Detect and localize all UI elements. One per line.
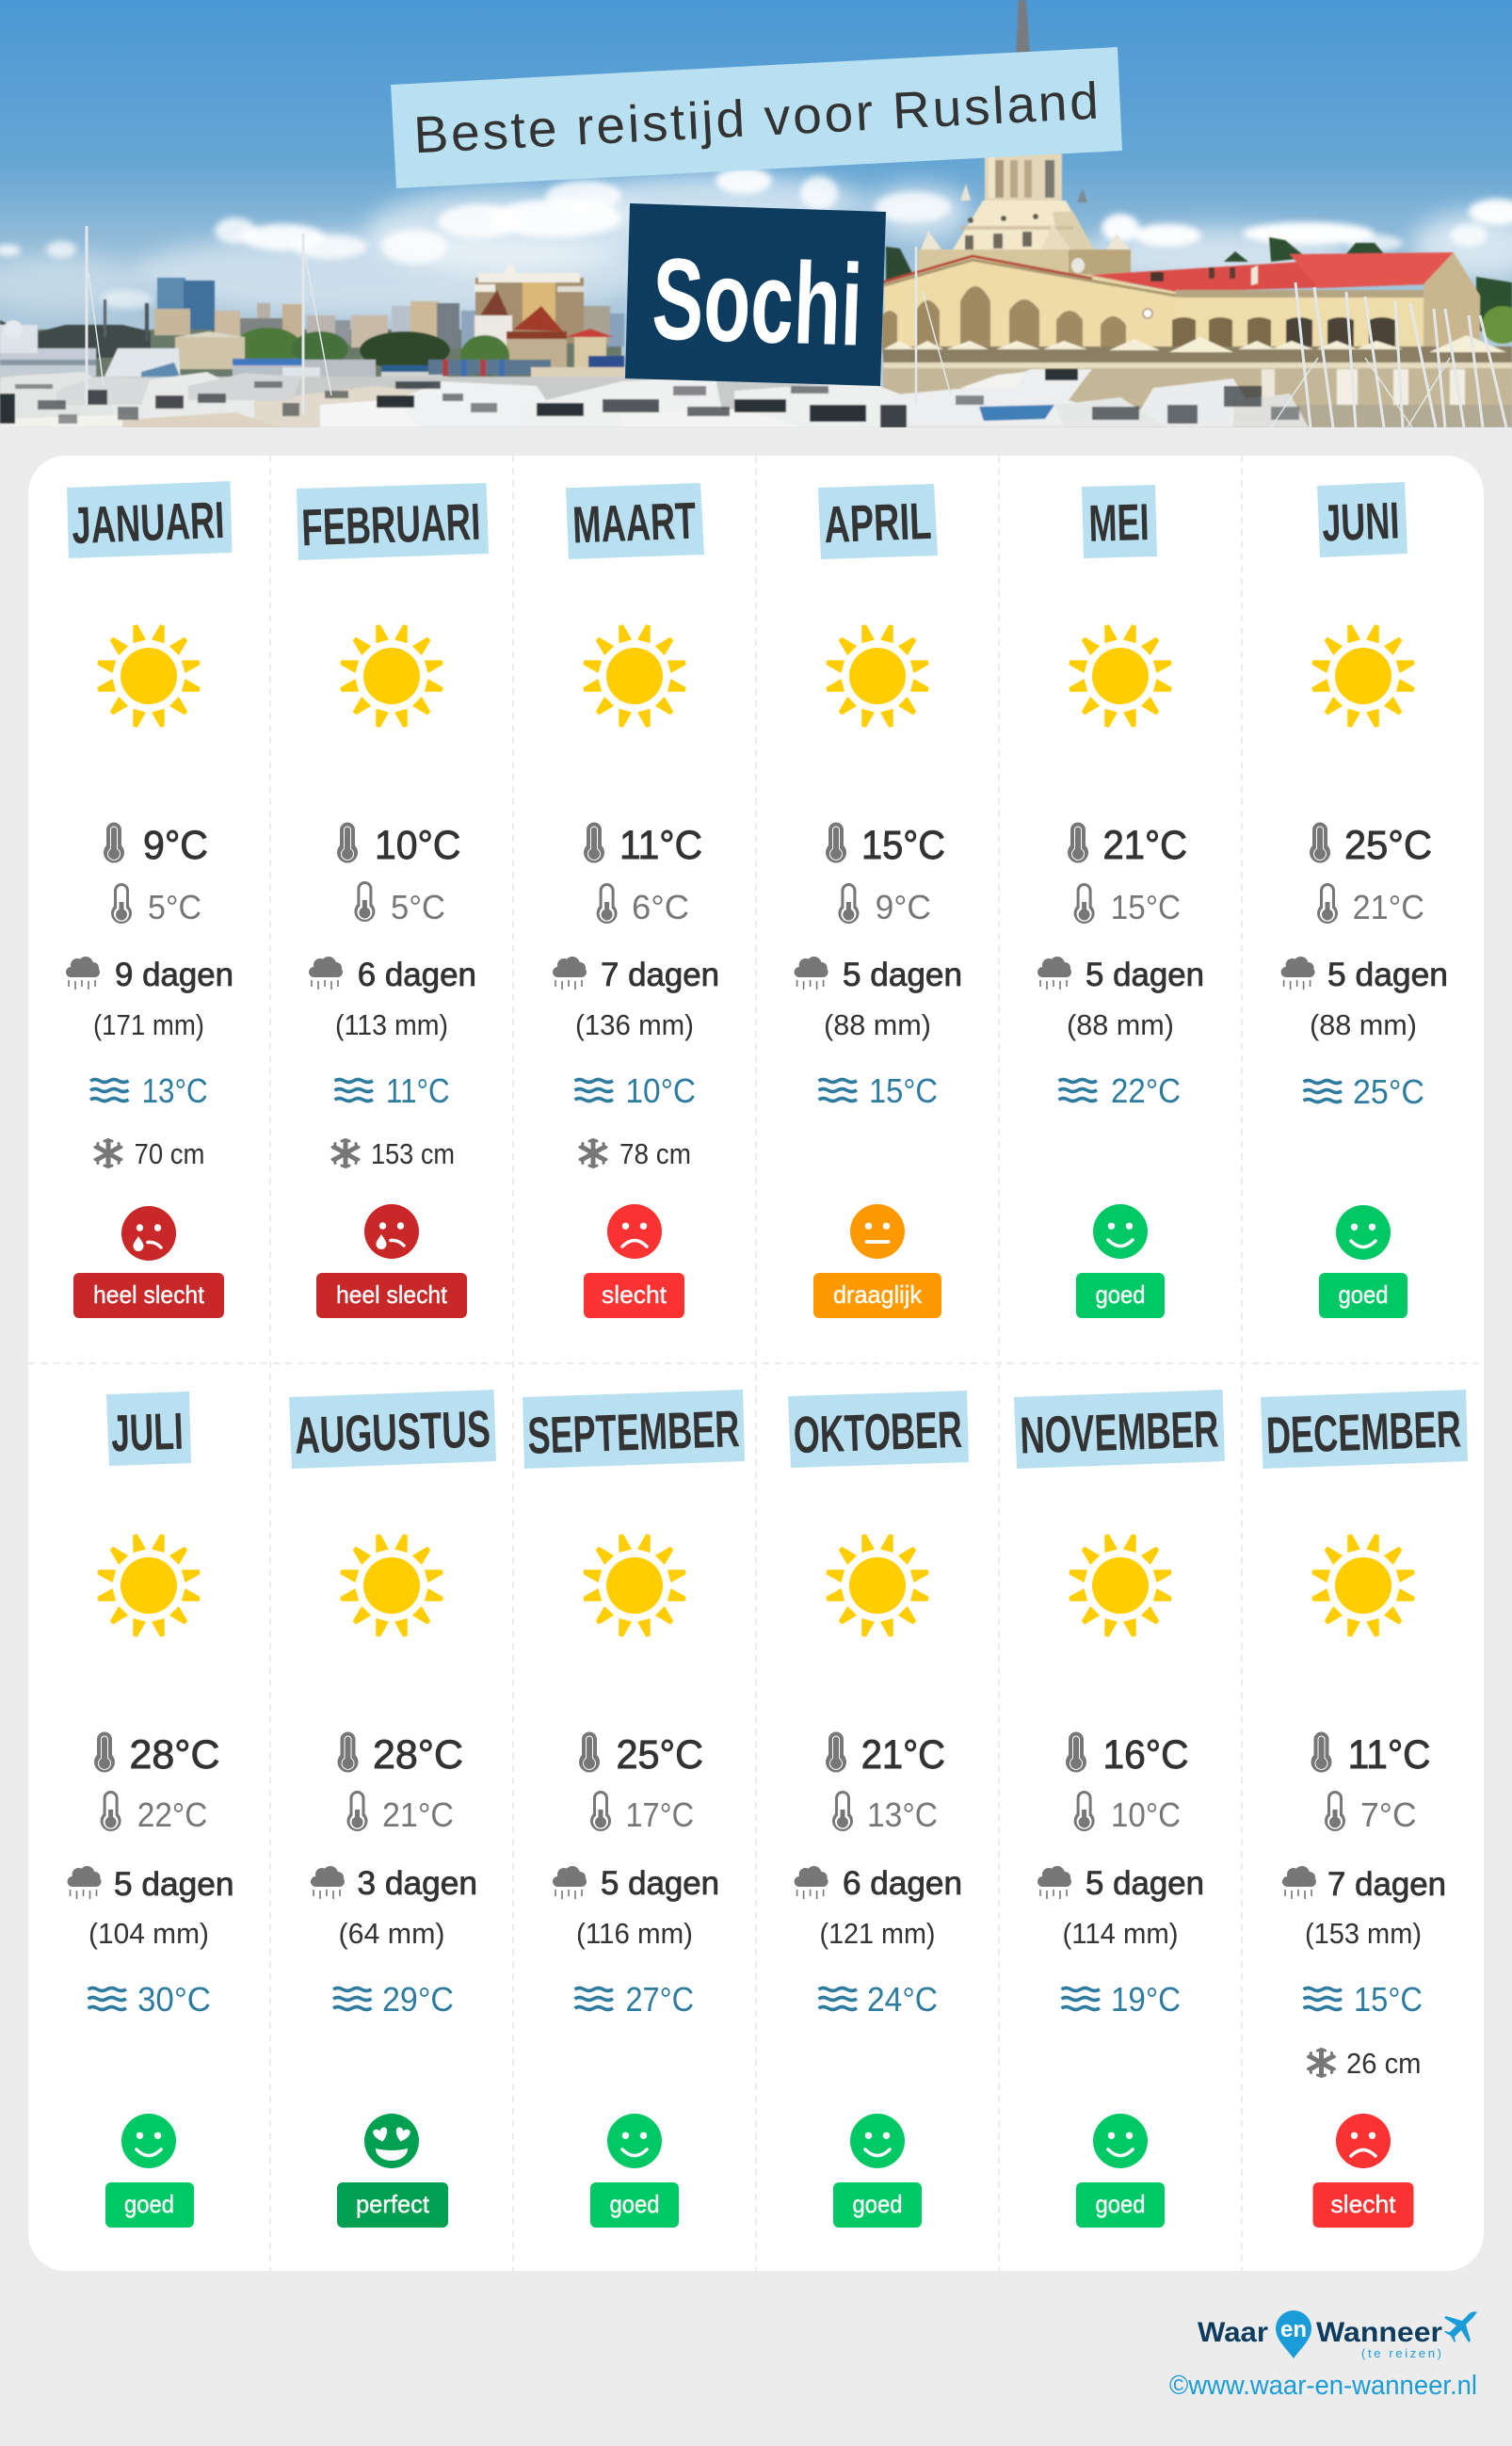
icon: sun bbox=[97, 624, 201, 728]
large yachts left bbox=[0, 348, 96, 377]
rating badge: slecht bbox=[1331, 2190, 1396, 2218]
rain days: 9 dagen bbox=[115, 957, 233, 993]
icon: thermometer low bbox=[1317, 883, 1338, 924]
sea temperature: 19°C bbox=[1111, 1980, 1181, 2019]
rainfall: (113 mm) bbox=[335, 1008, 448, 1041]
min temperature: 13°C bbox=[867, 1795, 938, 1834]
column: februari bbox=[297, 483, 489, 1318]
rainfall: (88 mm) bbox=[1310, 1008, 1417, 1041]
rain days: 7 dagen bbox=[1327, 1866, 1446, 1903]
icon: sun bbox=[1311, 1534, 1415, 1637]
rating face bbox=[121, 2114, 176, 2168]
column: maart bbox=[553, 483, 719, 1318]
icon: sun bbox=[1069, 1534, 1172, 1637]
logo: Waar en Wanneer bbox=[1198, 2310, 1477, 2360]
icon: sun bbox=[97, 1534, 201, 1637]
rainfall: (171 mm) bbox=[93, 1008, 204, 1041]
station building bbox=[882, 0, 1512, 427]
rain days: 5 dagen bbox=[1086, 1865, 1204, 1902]
month heading bbox=[788, 1391, 969, 1468]
sea temperature: 29°C bbox=[382, 1980, 454, 2019]
rating face bbox=[607, 2114, 662, 2168]
month heading: APRIL bbox=[823, 491, 932, 554]
tall apartment building bbox=[475, 278, 584, 344]
icon: waves bbox=[574, 1079, 613, 1102]
icon: thermometer high bbox=[1066, 1732, 1086, 1773]
icon: sun bbox=[583, 1534, 686, 1637]
rain days: 7 dagen bbox=[601, 957, 719, 993]
hero photo of Sochi harbour bbox=[0, 0, 1512, 427]
icon: waves bbox=[1303, 1081, 1342, 1102]
month heading bbox=[289, 1390, 496, 1469]
max temperature: 11°C bbox=[619, 823, 702, 868]
rain days: 5 dagen bbox=[1327, 957, 1448, 993]
icon: sun bbox=[1069, 624, 1172, 728]
icon: rain cloud bbox=[553, 1866, 587, 1899]
icon: thermometer low bbox=[1074, 883, 1095, 924]
icon: waves bbox=[1303, 1988, 1342, 2009]
rating badge: slecht bbox=[602, 1280, 668, 1309]
month heading bbox=[566, 483, 704, 559]
icon: rain cloud bbox=[309, 957, 343, 990]
icon: sun bbox=[1311, 624, 1415, 728]
icon: sun bbox=[340, 624, 443, 728]
rain days: 6 dagen bbox=[843, 1865, 962, 1902]
rating face bbox=[1336, 2114, 1391, 2168]
icon: rain cloud bbox=[795, 957, 828, 990]
column: april bbox=[795, 484, 962, 1318]
column: september bbox=[523, 1390, 745, 2228]
logo: Waar en Wanneer: en bbox=[1280, 2317, 1307, 2342]
sea temperature: 15°C bbox=[1354, 1980, 1423, 2019]
icon: waves bbox=[333, 1988, 371, 2009]
icon: airplane bbox=[1444, 2311, 1477, 2342]
icon: thermometer high bbox=[826, 823, 846, 863]
min temperature: 6°C bbox=[632, 888, 689, 926]
month heading bbox=[818, 484, 938, 559]
icon: sun bbox=[583, 624, 686, 728]
icon: thermometer high bbox=[337, 823, 358, 863]
month heading bbox=[1014, 1390, 1225, 1469]
column: juni bbox=[1281, 482, 1448, 1318]
max temperature: 28°C bbox=[373, 1732, 463, 1778]
sea temperature: 22°C bbox=[1111, 1071, 1181, 1110]
month heading: JANUARI bbox=[71, 491, 225, 555]
icon: rain cloud bbox=[1282, 1866, 1316, 1899]
icon: waves bbox=[88, 1988, 126, 2009]
icon: thermometer low bbox=[832, 1791, 853, 1831]
rating badge bbox=[337, 2182, 448, 2228]
masts bbox=[87, 226, 1506, 427]
icon: thermometer high bbox=[1310, 823, 1330, 863]
sea temperature: 25°C bbox=[1353, 1072, 1424, 1111]
rain days: 5 dagen bbox=[114, 1866, 233, 1903]
icon: rain cloud bbox=[553, 957, 587, 990]
rating face bbox=[1093, 1204, 1148, 1259]
column: december bbox=[1261, 1390, 1468, 2228]
min temperature: 10°C bbox=[1111, 1795, 1181, 1834]
rainfall: (121 mm) bbox=[819, 1917, 936, 1950]
rating face bbox=[850, 1204, 905, 1259]
rating badge bbox=[1076, 1273, 1165, 1318]
rating badge: goed bbox=[1339, 1280, 1388, 1309]
month heading: NOVEMBER bbox=[1019, 1399, 1219, 1465]
sea temperature: 24°C bbox=[867, 1980, 938, 2019]
panel: monthly calendar card bbox=[28, 456, 1484, 2271]
rating badge bbox=[1076, 2182, 1165, 2228]
column: augustus bbox=[289, 1390, 496, 2228]
icon: thermometer high bbox=[1311, 1732, 1331, 1773]
sea temperature: 30°C bbox=[137, 1980, 211, 2019]
min temperature: 5°C bbox=[391, 888, 445, 926]
month heading bbox=[67, 481, 232, 558]
icon: snowflake bbox=[95, 1139, 121, 1167]
rating badge: goed bbox=[853, 2190, 902, 2218]
title banner: Beste reistijd voor Rusland bbox=[412, 72, 1100, 164]
rating badge: goed bbox=[610, 2190, 659, 2218]
icon: sun bbox=[826, 1534, 929, 1637]
rain days: 6 dagen bbox=[358, 957, 476, 993]
max temperature: 25°C bbox=[1344, 823, 1432, 868]
max temperature: 28°C bbox=[130, 1732, 220, 1778]
icon: rain cloud bbox=[1037, 1866, 1071, 1899]
website credit: ©www.waar-en-wanneer.nl bbox=[1169, 2371, 1477, 2401]
icon: thermometer low bbox=[590, 1791, 611, 1831]
month heading: AUGUSTUS bbox=[294, 1399, 491, 1465]
rating face bbox=[364, 1204, 419, 1259]
column: oktober bbox=[788, 1391, 969, 2228]
rating badge bbox=[1319, 1273, 1407, 1318]
rating badge bbox=[73, 1273, 224, 1318]
rating face bbox=[607, 1204, 662, 1259]
max temperature: 25°C bbox=[616, 1732, 703, 1778]
icon: waves bbox=[335, 1079, 373, 1102]
rating badge bbox=[584, 1273, 684, 1318]
rating face bbox=[121, 1206, 176, 1261]
max temperature: 15°C bbox=[861, 823, 945, 868]
min temperature: 9°C bbox=[876, 888, 931, 926]
rain days: 5 dagen bbox=[1086, 957, 1204, 993]
icon: snowflake bbox=[580, 1139, 606, 1167]
rainfall: (104 mm) bbox=[88, 1917, 209, 1950]
month heading: JUNI bbox=[1321, 491, 1400, 553]
month heading: JULI bbox=[110, 1402, 185, 1462]
sea temperature: 10°C bbox=[625, 1071, 696, 1110]
rainfall: (136 mm) bbox=[575, 1008, 694, 1041]
sea temperature: 27°C bbox=[625, 1980, 694, 2019]
icon: snowflake bbox=[1309, 2049, 1335, 2077]
max temperature: 21°C bbox=[861, 1732, 945, 1778]
city name block bbox=[625, 203, 886, 386]
column: mei bbox=[1037, 485, 1204, 1318]
month heading bbox=[106, 1392, 191, 1466]
rating badge bbox=[1312, 2182, 1414, 2228]
icon: sun bbox=[826, 624, 929, 728]
month heading: SEPTEMBER bbox=[526, 1399, 740, 1465]
rainfall: (116 mm) bbox=[576, 1917, 693, 1950]
rain days: 5 dagen bbox=[843, 957, 962, 993]
icon: thermometer high bbox=[1068, 823, 1088, 863]
month heading bbox=[1317, 482, 1407, 557]
logo: Waar en Wanneer: (te reizen) bbox=[1361, 2346, 1441, 2360]
month heading: MAART bbox=[571, 491, 697, 555]
rain days: 5 dagen bbox=[601, 1865, 719, 1902]
min temperature: 17°C bbox=[625, 1795, 694, 1834]
icon: thermometer low bbox=[111, 883, 132, 924]
rain days: 3 dagen bbox=[358, 1865, 477, 1902]
icon: thermometer low bbox=[346, 1791, 367, 1831]
icon: thermometer high bbox=[584, 823, 604, 863]
icon: waves bbox=[1062, 1988, 1100, 2009]
icon: rain cloud bbox=[68, 1866, 102, 1899]
icon: thermometer low bbox=[1074, 1791, 1095, 1831]
moored yachts along the front bbox=[0, 369, 1309, 427]
rating face bbox=[850, 2114, 905, 2168]
month heading bbox=[523, 1390, 745, 1469]
snowfall: 78 cm bbox=[619, 1137, 691, 1170]
rainfall: (114 mm) bbox=[1062, 1917, 1179, 1950]
icon: thermometer low bbox=[354, 881, 375, 922]
snowfall: 26 cm bbox=[1346, 2047, 1422, 2080]
icon: thermometer high bbox=[579, 1732, 600, 1773]
column: november bbox=[1014, 1390, 1225, 2228]
arches bbox=[882, 286, 1126, 353]
title banner bbox=[391, 47, 1122, 188]
icon: rain cloud bbox=[311, 1866, 345, 1899]
column: juli bbox=[68, 1392, 233, 2228]
icon: thermometer low bbox=[101, 1791, 121, 1831]
month heading bbox=[297, 483, 489, 560]
rating badge bbox=[590, 2182, 679, 2228]
rating badge: perfect bbox=[356, 2190, 430, 2218]
rating face bbox=[1336, 1205, 1391, 1260]
left skyline bbox=[0, 330, 621, 381]
rating face bbox=[364, 2114, 419, 2168]
trees and waterfront bbox=[241, 328, 298, 360]
snowfall: 70 cm bbox=[134, 1137, 205, 1170]
rating badge: draaglijk bbox=[833, 1280, 923, 1309]
rainfall: (64 mm) bbox=[339, 1917, 444, 1950]
umbrellas and terrace bbox=[883, 335, 1506, 352]
max temperature: 16°C bbox=[1103, 1732, 1188, 1778]
month heading: OKTOBER bbox=[793, 1400, 963, 1464]
icon: thermometer high bbox=[104, 823, 124, 863]
month heading: MEI bbox=[1088, 492, 1150, 553]
min temperature: 21°C bbox=[382, 1795, 454, 1834]
icon: map pin bbox=[1276, 2310, 1311, 2358]
rating face bbox=[1093, 2114, 1148, 2168]
logo: Waar en Wanneer: Wanneer bbox=[1316, 2317, 1442, 2348]
icon: snowflake bbox=[332, 1139, 359, 1167]
snowfall: 153 cm bbox=[371, 1137, 455, 1170]
icon: thermometer high bbox=[94, 1732, 115, 1773]
min temperature: 5°C bbox=[148, 888, 201, 926]
icon: sun bbox=[340, 1534, 443, 1637]
min temperature: 21°C bbox=[1353, 888, 1424, 926]
max temperature: 11°C bbox=[1348, 1732, 1431, 1778]
min temperature: 7°C bbox=[1360, 1795, 1417, 1834]
max temperature: 10°C bbox=[375, 823, 461, 868]
rating badge: goed bbox=[1096, 1280, 1145, 1309]
rating badge bbox=[316, 1273, 467, 1318]
rating badge: goed bbox=[1096, 2190, 1145, 2218]
icon: thermometer low bbox=[597, 883, 618, 924]
sea temperature: 15°C bbox=[869, 1071, 938, 1110]
max temperature: 9°C bbox=[143, 823, 208, 868]
sea temperature: 13°C bbox=[142, 1071, 208, 1110]
rating badge: goed bbox=[124, 2190, 174, 2218]
min temperature: 22°C bbox=[137, 1795, 207, 1834]
sea temperature: 11°C bbox=[386, 1071, 450, 1110]
icon: rain cloud bbox=[1281, 957, 1315, 990]
icon: thermometer high bbox=[337, 1732, 358, 1773]
rating badge: heel slecht bbox=[336, 1280, 448, 1309]
rating badge bbox=[813, 1273, 941, 1318]
icon: rain cloud bbox=[795, 1866, 828, 1899]
logo: Waar en Wanneer: Waar bbox=[1198, 2317, 1268, 2348]
icon: waves bbox=[819, 1079, 857, 1102]
rating badge: heel slecht bbox=[93, 1280, 205, 1309]
icon: thermometer low bbox=[1325, 1791, 1345, 1831]
icon: waves bbox=[1058, 1079, 1097, 1102]
month heading: FEBRUARI bbox=[300, 492, 481, 556]
column: januari bbox=[66, 481, 233, 1318]
icon: waves bbox=[574, 1988, 613, 2009]
min temperature: 15°C bbox=[1111, 888, 1181, 926]
icon: rain cloud bbox=[1037, 957, 1071, 990]
max temperature: 21°C bbox=[1103, 823, 1187, 868]
month heading bbox=[1082, 485, 1157, 558]
icon: waves bbox=[90, 1079, 128, 1102]
city name block: Sochi bbox=[651, 234, 864, 371]
rating badge bbox=[833, 2182, 922, 2228]
rainfall: (153 mm) bbox=[1305, 1917, 1422, 1950]
icon: waves bbox=[819, 1988, 857, 2009]
rainfall: (88 mm) bbox=[824, 1008, 931, 1041]
rainfall: (88 mm) bbox=[1067, 1008, 1174, 1041]
rating badge bbox=[105, 2182, 194, 2228]
icon: thermometer high bbox=[826, 1732, 846, 1773]
icon: rain cloud bbox=[66, 957, 100, 990]
icon: thermometer low bbox=[838, 883, 859, 924]
